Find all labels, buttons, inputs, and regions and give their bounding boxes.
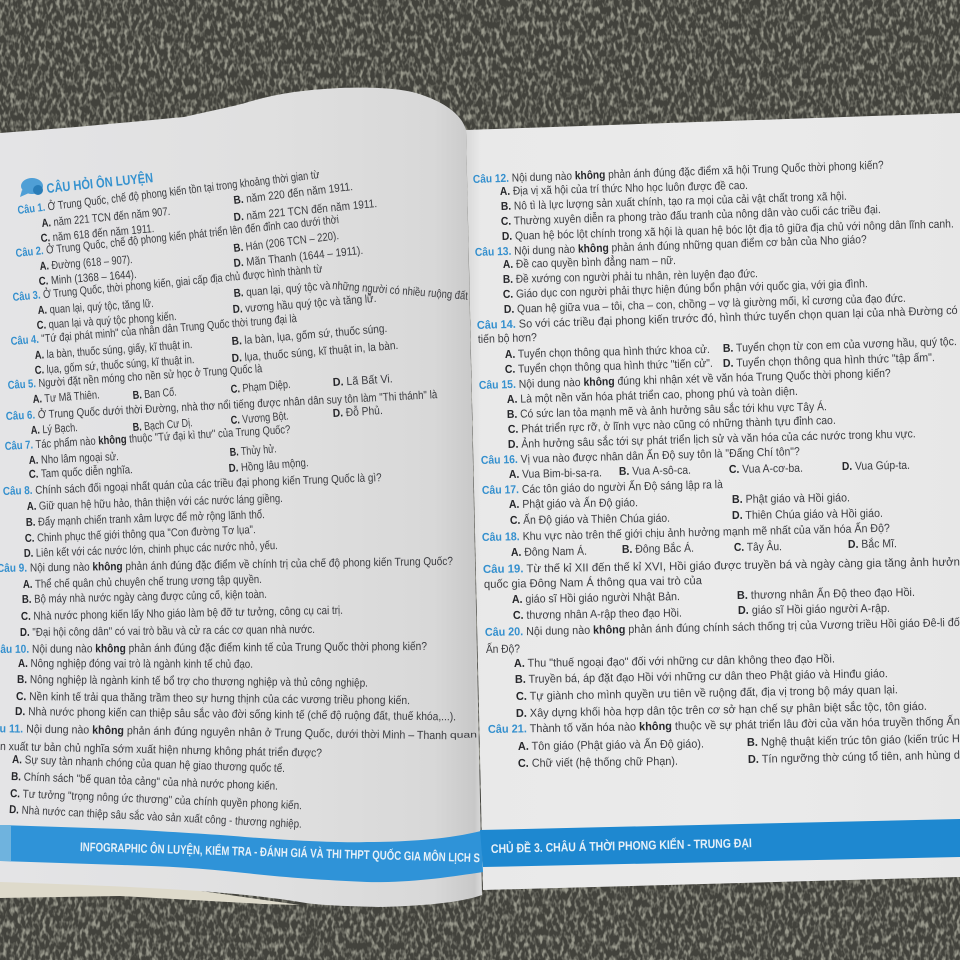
question 12: B. Nô tì là lực lượng sản xuất chính, tạo ra mọi của cải vật chất trong xã hội. (501, 191, 847, 213)
question 9: C. Nhà nước phong kiến lấy Nho giáo làm bệ đỡ tư tưởng, công cụ cai trị. (21, 605, 343, 623)
question 15: A. Là một nền văn hóa phát triển cao, phong phú và toàn diện. (507, 385, 798, 406)
question 16: C. Vua A-cơ-ba. (729, 463, 803, 476)
question 21: A. Tôn giáo (Phật giáo và Ấn Độ giáo). (518, 736, 704, 753)
question 9: A. Thể chế quân chủ chuyên chế trung ương tập quyền. (23, 573, 262, 591)
question 17: A. Phật giáo và Ấn Độ giáo. (509, 495, 638, 511)
question 13: Câu 13. Nội dung nào không phản ánh đúng những quan điểm cơ bản của Nho giáo? (475, 233, 867, 259)
question 8 (3, 472, 382, 560)
question 1 (17, 167, 378, 245)
question 11: B. Chính sách "bế quan tỏa cảng" của nhà nước phong kiến. (11, 771, 278, 793)
question 3 (12, 261, 469, 332)
question 18 (482, 521, 897, 559)
question 14 (477, 304, 958, 376)
question 2: Câu 2. Ở Trung Quốc, chế độ phong kiến phát triển lên đến đỉnh cao dưới thời (15, 212, 340, 260)
question 19: Câu 19. Từ thế kỉ XII đến thế kỉ XVI, Hồi giáo được truyền bá và ngày càng gia tăng ảnh hưởn (483, 557, 960, 576)
question 19 (483, 557, 960, 622)
question 11: n xuất tư bản chủ nghĩa sớm xuất hiện nhưng không phát triển được? (0, 740, 322, 760)
question 16: A. Vua Bim-bi-sa-ra. (509, 467, 602, 481)
question 17 (482, 477, 883, 527)
question 6: A. Lý Bạch. (30, 422, 78, 437)
question 18: B. Đông Bắc Á. (622, 542, 694, 556)
question 3: B. quan lại, quý tộc và (233, 280, 331, 300)
question 1: D. năm 221 TCN đến năm 1911. (233, 198, 378, 224)
question 4 (10, 313, 399, 377)
question 10: D. Nhà nước phong kiến can thiệp sâu sắc vào đời sống kinh tế (chế độ ruộng đất, thuế khóa,...). (15, 705, 456, 723)
question 10: Câu 10. Nội dung nào không phản ánh đúng đặc điểm kinh tế của Trung Quốc thời phong kiến? (0, 640, 427, 656)
question 4: C. lụa, gốm sứ, thuốc súng, kĩ thuật in. (34, 354, 195, 377)
question 8: A. Giữ quan hệ hữu hảo, thân thiện với các nước láng giềng. (27, 493, 283, 513)
question 1: A. năm 221 TCN đến năm 907. (41, 206, 171, 230)
question 1: Câu 1. Ở Trung Quốc, chế độ phong kiến tồn tại trong khoảng thời gian từ (17, 167, 320, 217)
question 18: A. Đông Nam Á. (511, 545, 587, 559)
question 17: B. Phật giáo và Hồi giáo. (732, 492, 850, 506)
right footer band (480, 819, 960, 867)
question 18: D. Bắc Mĩ. (848, 537, 897, 551)
question 10 (0, 640, 456, 723)
question 20 (485, 617, 960, 720)
question 3: những người có nhiều ruộng đất (332, 280, 469, 303)
question 2: B. Hán (206 TCN – 220). (233, 230, 340, 255)
question 19: C. thương nhân A-rập theo đạo Hồi. (513, 608, 682, 622)
question 4: D. lụa, thuốc súng, kĩ thuật in, la bàn. (231, 340, 399, 365)
right page questions (473, 159, 960, 770)
question 16: D. Vua Gúp-ta. (842, 460, 910, 473)
question 8: C. Chinh phục thế giới thông qua "Con đường Tơ lụa". (25, 524, 256, 545)
question 10: C. Nền kinh tế trải qua thăng trầm theo sự hưng thịnh của các vương triều phong kiến. (16, 691, 410, 707)
question 13: B. Đề xướng con người phải tu nhân, rèn luyện đạo đức. (503, 268, 758, 286)
question 13: A. Đề cao quyền bình đẳng nam – nữ. (503, 253, 676, 271)
question 3: D. vương hầu quý tộc và tăng lữ. (232, 293, 377, 316)
question 7: Câu 7. Tác phẩm nào không thuộc "Tứ đại kì thư" của Trung Quốc? (4, 423, 291, 453)
question 7: B. Thủy hử. (229, 443, 277, 459)
question 11 (0, 723, 477, 831)
question 11: Câu 11. Nội dung nào không phản ánh đúng nguyên nhân ở Trung Quốc, dưới thời Minh – Thanh (0, 723, 447, 742)
question 19: A. giáo sĩ Hồi giáo người Nhật Bản. (512, 591, 680, 606)
footer title left: INFOGRAPHIC ÔN LUYỆN, KIỂM TRA - ĐÁNH GIÁ VÀ THI THPT QUỐC GIA MÔN LỊCH S (80, 839, 480, 865)
question 20: D. Xây dựng khối hòa hợp dân tộc trên cơ sở hạn chế sự phân biệt sắc tộc, tôn giáo. (516, 700, 927, 720)
question 15: B. Có sức lan tỏa mạnh mẽ và ảnh hưởng sâu sắc tới khu vực Tây Á. (507, 400, 827, 421)
question 6: Câu 6. Ở Trung Quốc dưới thời Đường, nhà thơ nổi tiếng được nhân dân suy tôn làm "Thi thánh" là (5, 387, 438, 423)
question 15 (479, 368, 916, 451)
question 18: C. Tây Âu. (734, 539, 782, 554)
question 5: Câu 5. Người đặt nền móng cho nền sử học ở Trung Quốc là (7, 363, 263, 392)
question 2: A. Đường (618 – 907). (39, 254, 133, 273)
question 20: A. Thu "thuế ngoại đạo" đối với những cư dân không theo đạo Hồi. (514, 654, 835, 670)
question 14: D. Tuyển chọn thông qua hình thức "tập ấm". (723, 351, 935, 370)
heading: CÂU HỎI ÔN LUYỆN: CÂU HỎI ÔN LUYỆN (46, 169, 154, 196)
question 4: Câu 4. "Tứ đại phát minh" của nhân dân Trung Quốc thời trung đại là (10, 313, 298, 348)
question 3: A. quan lại, quý tộc, tăng lữ. (37, 298, 154, 317)
question 19: quốc gia Đông Nam Á thông qua vai trò của (484, 574, 703, 591)
question 5: D. Lã Bất Vi. (332, 373, 393, 389)
question 7: C. Tam quốc diễn nghĩa. (29, 463, 133, 481)
question 3: Câu 3. Ở Trung Quốc, thời phong kiến, giai cấp địa chủ được hình thành từ (12, 261, 323, 304)
panel: right page (466, 113, 960, 890)
question 13 (475, 233, 906, 316)
question 14: tiến bộ hơn? (478, 332, 537, 346)
question 5 (7, 363, 393, 406)
question 12: C. Thường xuyên diễn ra phong trào đấu tranh của nông dân vào cuối các triều đại. (501, 203, 881, 228)
left footer band (0, 825, 483, 882)
question 21: C. Chữ viết (hệ thống chữ Phạn). (518, 756, 678, 770)
question 15: D. Ảnh hưởng sâu sắc tới sự phát triển lịch sử và văn hóa của các nước trong khu vực. (508, 426, 916, 451)
question 6 (5, 387, 438, 437)
question 4: A. la bàn, thuốc súng, giấy, kĩ thuật in. (34, 339, 193, 362)
question 6: B. Bạch Cư Dị. (132, 417, 193, 434)
question 9: B. Bộ máy nhà nước ngày càng được củng cố, kiện toàn. (22, 589, 267, 606)
question 5: A. Tư Mã Thiên. (32, 389, 100, 406)
question 8: Câu 8. Chính sách đối ngoại nhất quán của các triều đại phong kiến Trung Quốc là gì? (3, 472, 382, 498)
question 7 (4, 423, 309, 481)
question 5: C. Phạm Diệp. (230, 379, 291, 396)
question 2 (15, 212, 364, 288)
question 6: C. Vương Bột. (230, 410, 289, 427)
question 19: B. thương nhân Ấn Độ theo đạo Hồi. (737, 585, 915, 602)
question 17: D. Thiên Chúa giáo và Hồi giáo. (732, 508, 883, 522)
question 3: C. quan lại và quý tộc phong kiến. (36, 311, 177, 332)
panel: page stack under left page (0, 880, 300, 905)
question 19: D. giáo sĩ Hồi giáo người A-rập. (738, 603, 890, 617)
question 20: B. Truyền bá, áp đặt đạo Hồi với những cư dân theo Phật giáo và Hinđu giáo. (515, 668, 888, 686)
question 14: C. Tuyển chọn thông qua hình thức "tiến cử". (505, 357, 713, 376)
question 2: C. Minh (1368 – 1644). (38, 269, 137, 288)
question 12: Câu 12. Nội dung nào không phản ánh đúng đặc điểm xã hội Trung Quốc thời phong kiến? (473, 159, 884, 186)
question 13: D. Quan hệ giữa vua – tôi, cha – con, chồng – vợ là giường mối, kỉ cương của đạo đức. (504, 293, 906, 316)
question 17: Câu 17. Các tôn giáo do người Ấn Độ sáng lập ra là (482, 477, 724, 497)
question 16: Câu 16. Vị vua nào được nhân dân Ấn Độ suy tôn là "Đấng Chí tôn"? (481, 444, 800, 467)
question 11: C. Tư tưởng "trọng nông ức thương" của chính quyền phong kiến. (10, 788, 302, 812)
question 9: D. "Đại hội công dân" có vai trò bầu và cử ra các cơ quan nhà nước. (20, 624, 315, 639)
question 4: B. la bàn, lụa, gốm sứ, thuốc súng. (231, 323, 388, 348)
question 10: B. Nông nghiệp là ngành kinh tế bổ trợ cho thương nghiệp và thủ công nghiệp. (17, 673, 368, 690)
question 11: D. Nhà nước can thiệp sâu sắc vào sản xuất công - thương nghiệp. (9, 803, 302, 831)
question 9 (0, 555, 453, 639)
question 21 (488, 714, 960, 770)
question 7: D. Hồng lâu mộng. (228, 457, 309, 475)
question 7: A. Nho lâm ngoại sử. (29, 451, 119, 467)
question 20: C. Tự giành cho mình quyền ưu tiên về ruộng đất, địa vị trong bộ máy quan lại. (516, 684, 898, 703)
question 17: C. Ấn Độ giáo và Thiên Chúa giáo. (510, 511, 670, 527)
question 6: D. Đỗ Phủ. (332, 404, 383, 420)
question 11: quan (450, 730, 477, 740)
question 15: C. Phát triển rực rỡ, ở lĩnh vực nào cũng có những thành tựu đỉnh cao. (508, 414, 836, 436)
question 10: A. Nông nghiệp đóng vai trò là ngành kinh tế chủ đạo. (18, 658, 253, 671)
footer title right: CHỦ ĐỀ 3. CHÂU Á THỜI PHONG KIẾN - TRUNG ĐẠI (491, 835, 752, 856)
question 12 (473, 159, 954, 243)
question 20: Ấn Độ? (486, 641, 520, 656)
question 16: B. Vua A-sô-ca. (619, 465, 691, 478)
question 16 (481, 444, 910, 481)
question 15: Câu 15. Nội dung nào không đúng khi nhận xét về văn hóa Trung Quốc thời phong kiến? (479, 368, 891, 392)
question 11: A. Sự suy tàn nhanh chóng của quan hệ giao thương quốc tế. (12, 754, 285, 775)
question 9: Câu 9. Nội dung nào không phản ánh đúng đặc điểm về chính trị của chế độ phong kiến Trung Quốc? (0, 555, 453, 575)
question 8: D. Liên kết với các nước lớn, chinh phục các nước nhỏ, yếu. (24, 540, 278, 560)
panel: left page (0, 88, 482, 907)
question 18: Câu 18. Khu vực nào trên thế giới chịu ảnh hưởng mạnh mẽ nhất của văn hóa Ấn Độ? (482, 521, 890, 544)
question 14: A. Tuyển chọn thông qua hình thức khoa cử. (505, 343, 710, 361)
question 2: D. Mãn Thanh (1644 – 1911). (233, 245, 364, 270)
icon: question speech bubble (20, 178, 43, 197)
question 1: B. năm 220 đến năm 1911. (233, 181, 354, 207)
question 13: C. Giáo dục con người phải thực hiện đúng bổn phận với quốc gia, với gia đình. (503, 277, 868, 301)
left page questions (0, 167, 477, 831)
question 1: C. năm 618 đến năm 1911. (40, 223, 155, 245)
question 8: B. Đẩy mạnh chiến tranh xâm lược để mở rộng lãnh thổ. (26, 508, 265, 529)
question 5: B. Ban Cố. (132, 387, 177, 402)
question 12: A. Địa vị xã hội của trí thức Nho học luôn được đề cao. (500, 180, 748, 198)
